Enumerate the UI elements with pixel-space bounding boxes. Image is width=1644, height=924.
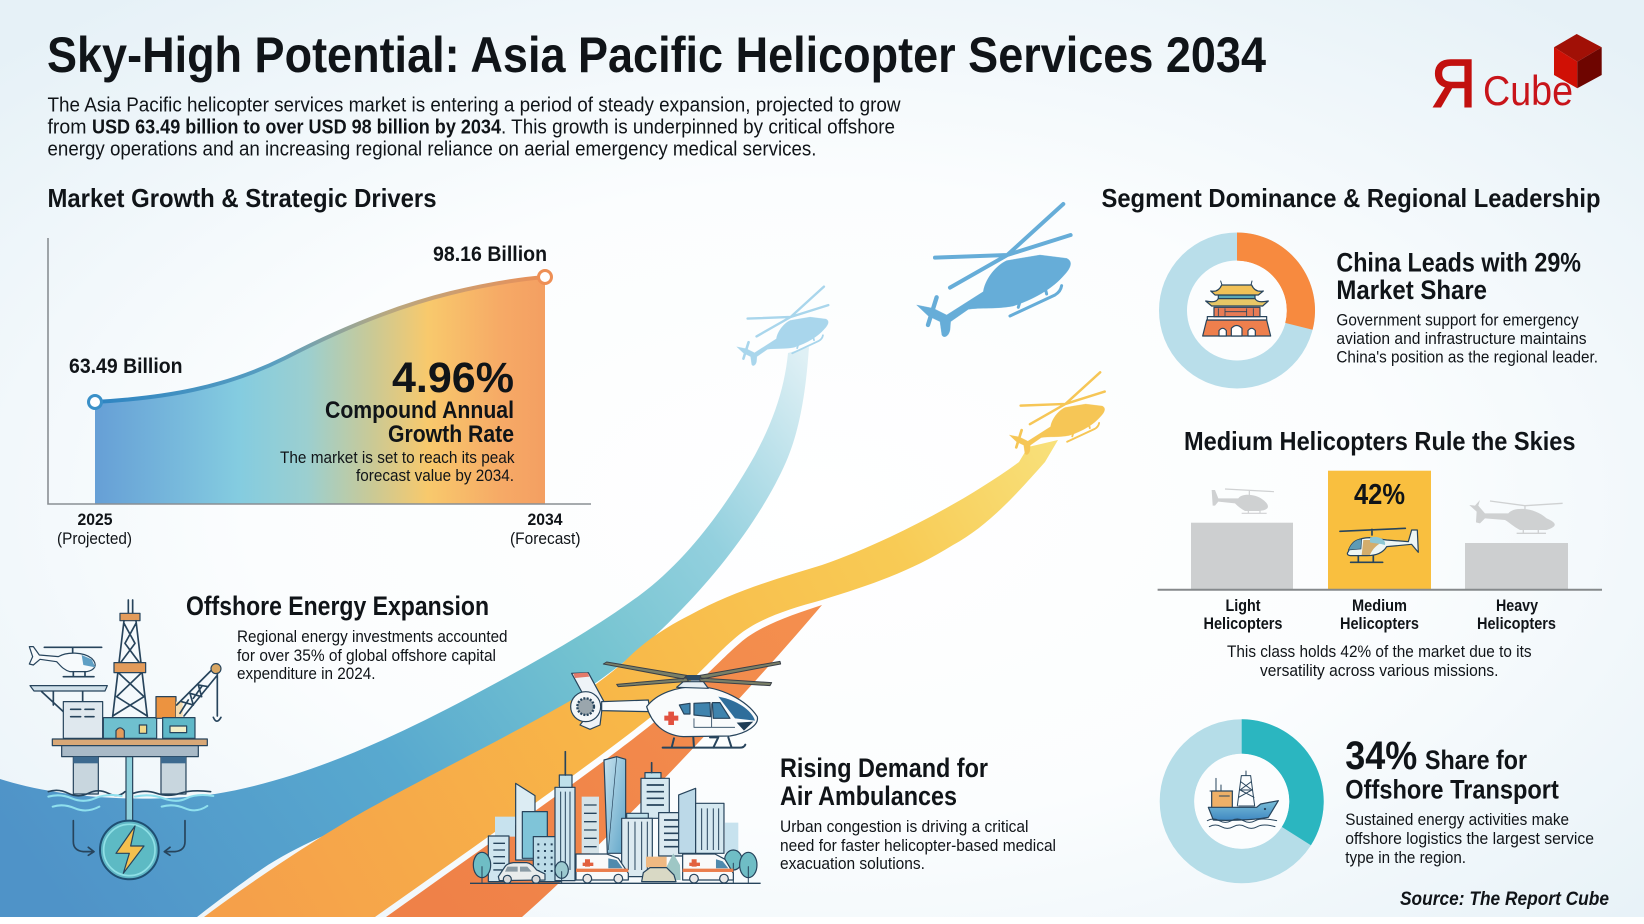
intro paragraph: The Asia Pacific helicopter services market is entering a period of steady expansion, projected to grow	[48, 94, 901, 116]
area chart: market growth	[48, 238, 591, 548]
icon: offshore ship	[1207, 771, 1278, 828]
icon: car	[498, 863, 545, 883]
label: end value: 98.16 Billion	[433, 243, 547, 266]
icon: ambulance left	[576, 854, 628, 883]
donut chart: China 29%	[1173, 232, 1315, 374]
axis label: 2034: (Forecast)	[510, 529, 580, 548]
text: offshore transport	[1345, 734, 1594, 867]
heading: air ambulances: Air Ambulances	[780, 781, 957, 811]
axis label: 2034	[510, 510, 580, 548]
label: start value: 63.49 Billion	[69, 355, 182, 378]
icon: small light blue helicopter	[737, 287, 828, 366]
labels: heavy: Helicopters	[1477, 614, 1556, 633]
labels: medium: Medium	[1352, 596, 1407, 615]
text: China leads: China's position as the regional leader.	[1336, 348, 1598, 367]
labels: medium	[1340, 596, 1419, 633]
axis label: 2034: 2034	[528, 510, 563, 529]
icons: class helicopters	[1212, 489, 1563, 562]
heading: medium helicopters: Medium Helicopters Rule the Skies	[1184, 426, 1576, 456]
value: 42%: 42%	[1354, 479, 1405, 511]
text: offshore transport: Share for	[1425, 745, 1527, 775]
bar chart: helicopter classes	[1158, 471, 1602, 633]
labels: light: Helicopters	[1204, 614, 1282, 633]
logo: RCube: Cube	[1483, 67, 1573, 114]
text: offshore energy: for over 35% of global offshore capital	[237, 646, 496, 665]
icon: Chinese gate	[1203, 281, 1271, 336]
bottom white strip	[0, 917, 1644, 924]
labels: light: Light	[1226, 596, 1261, 615]
callout: CAGR: forecast value by 2034.	[356, 466, 514, 485]
intro paragraph: USD 63.49 billion to over USD 98 billion by 2034	[92, 116, 502, 138]
text: China leads: Market Share	[1336, 275, 1487, 305]
labels: medium: Helicopters	[1340, 614, 1419, 633]
source note: Source: The Report Cube	[1400, 889, 1609, 910]
bar: heavy	[1465, 543, 1568, 590]
axis label: 2025	[57, 510, 132, 548]
text: offshore transport: Sustained energy activities make	[1345, 810, 1569, 829]
labels: heavy: Heavy	[1496, 596, 1538, 615]
heading: market growth: Market Growth & Strategic Drivers	[48, 183, 436, 213]
title: Sky-High Potential: Asia Pacific Helicopter Services 2034	[47, 27, 1266, 83]
heading: air ambulances: Rising Demand for	[780, 753, 988, 783]
text: China leads: Government support for emergency	[1336, 311, 1579, 330]
axis label: 2025: (Projected)	[57, 529, 132, 548]
text: air ambulances: need for faster helicopter-based medical	[780, 836, 1056, 855]
intro paragraph	[48, 94, 901, 160]
text: air ambulances	[780, 817, 1056, 873]
logo: RCube	[1431, 34, 1602, 122]
icon: rig helicopter	[29, 647, 102, 677]
callout: CAGR	[280, 354, 515, 485]
icon: air ambulance helicopter	[571, 661, 781, 748]
text: offshore energy: Regional energy investments accounted	[237, 627, 508, 646]
icon: large blue helicopter	[917, 204, 1071, 337]
text: China leads: China Leads with 29%	[1336, 248, 1581, 278]
bar: medium	[1328, 471, 1431, 590]
text: class note: This class holds 42% of the market due to its	[1227, 642, 1532, 661]
logo: RCube: Я	[1431, 46, 1476, 122]
labels: light	[1204, 596, 1282, 633]
text: class note	[1227, 642, 1532, 680]
callout: CAGR: Growth Rate	[388, 421, 514, 448]
text: offshore transport: offshore logistics the largest service	[1345, 829, 1594, 848]
text: China leads: aviation and infrastructure maintains	[1336, 329, 1587, 348]
intro paragraph: from	[48, 116, 86, 138]
donut chart: offshore 34%	[1177, 719, 1324, 866]
axis label: 2025: 2025	[78, 510, 112, 529]
text: air ambulances: Urban congestion is driving a critical	[780, 817, 1028, 836]
text: China leads	[1336, 248, 1598, 367]
text: offshore transport: type in the region.	[1345, 848, 1466, 867]
intro paragraph: energy operations and an increasing regional reliance on aerial emergency medical services.	[48, 138, 816, 160]
text: offshore energy: expenditure in 2024.	[237, 664, 376, 683]
heading: air ambulances	[780, 753, 988, 811]
heading: offshore energy: Offshore Energy Expansion	[186, 591, 489, 621]
text: offshore transport: Offshore Transport	[1345, 775, 1559, 805]
swoosh: yellow band	[204, 440, 1058, 917]
intro paragraph: . This growth is underpinned by critical offshore	[501, 116, 895, 138]
text: air ambulances: exacuation solutions.	[780, 854, 925, 873]
text: class note: versatility across various missions.	[1260, 661, 1498, 680]
swoosh: orange band	[386, 605, 822, 917]
swoosh: blue growth band	[0, 347, 809, 917]
text: offshore transport: 34%	[1345, 734, 1417, 778]
callout: CAGR: The market is set to reach its peak	[280, 448, 515, 467]
icon: city skyline with ambulances	[470, 752, 761, 883]
bar: light	[1191, 523, 1293, 590]
icon: oil rig	[29, 600, 221, 879]
labels: heavy	[1477, 596, 1556, 633]
callout: CAGR: 4.96%	[392, 354, 514, 402]
icon: trees	[473, 850, 757, 883]
icon: yellow helicopter	[1009, 372, 1105, 455]
icon: ambulance right	[683, 854, 733, 883]
icon: small van	[642, 853, 681, 882]
text: offshore energy	[237, 627, 508, 683]
heading: segment dominance: Segment Dominance & Regional Leadership	[1102, 183, 1600, 213]
callout: CAGR: Compound Annual	[325, 397, 514, 424]
